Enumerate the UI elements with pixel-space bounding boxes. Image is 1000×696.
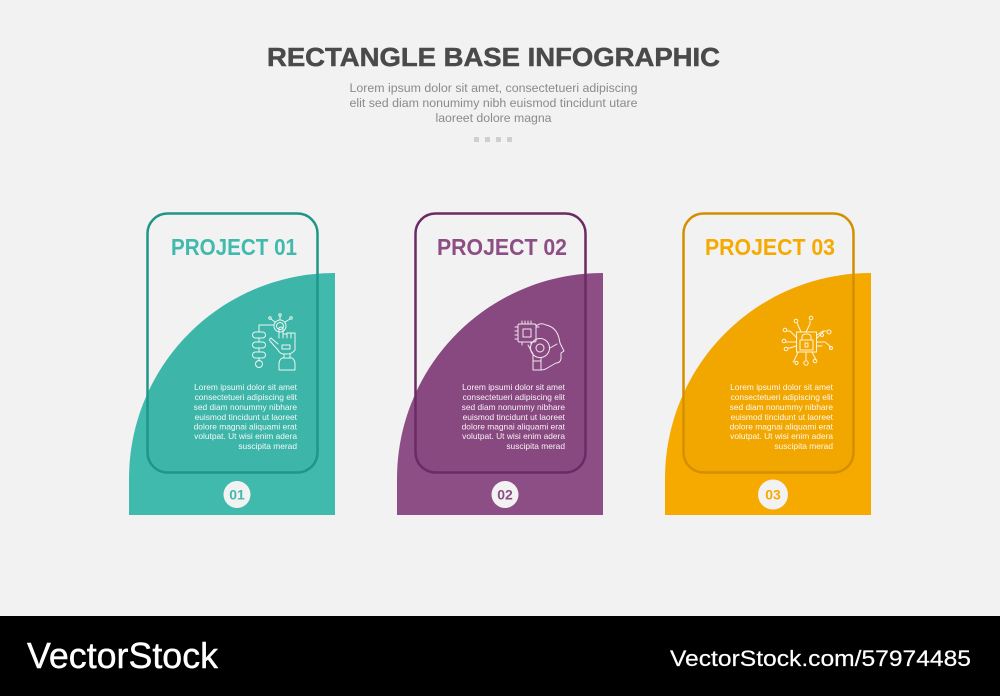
dots divider [474,137,512,142]
footer logo: VectorStock [27,635,219,676]
body text 01: dolore magnai aliquami erat [194,422,298,432]
body text 02: sed diam nonummy nibhare [462,402,565,412]
number badge 01: 01 [229,486,245,502]
number badge 03: 03 [765,486,781,502]
body text 02: Lorem ipsumi dolor sit amet [462,382,566,392]
body text 01 [194,382,298,451]
card overlap tint 02 [418,274,576,389]
body text 03: volutpat. Ut wisi enim adera [730,431,833,441]
footer url: VectorStock.com/57974485 [670,646,971,671]
body text 03: sed diam nonummy nibhare [730,402,833,412]
number badge 03 [758,480,788,510]
quarter-round base shape 01 [129,273,335,515]
quarter-round base shape 02 [397,273,603,515]
icon: AI chip head [515,321,564,370]
body text 03: Lorem ipsumi dolor sit amet [730,382,834,392]
body text 03 [730,382,834,451]
rounded outline card 02 [416,214,586,472]
subtitle text: Lorem ipsum dolor sit amet, consectetueri adipiscing [350,81,638,95]
subtitle text: laoreet dolore magna [436,111,552,125]
body text 01: euismod tincidunt ut laoreet [195,412,298,422]
body text 02: consectetueri adipiscing elit [463,392,566,402]
heading 03: PROJECT 03 [705,234,835,260]
card overlap tint 01 [190,278,291,333]
body text 02 [462,382,566,451]
body text 02: suscipita merad [506,441,565,451]
body text 01: suscipita merad [238,441,297,451]
quarter-round base shape 03 [665,273,871,515]
body text 02: dolore magnai aliquami erat [462,422,566,432]
body text 03: dolore magnai aliquami erat [730,422,834,432]
body text 03: suscipita merad [774,441,833,451]
panel: project 01 [129,214,335,515]
body text 02: euismod tincidunt ut laoreet [463,412,566,422]
subtitle text: elit sed diam nonumimy nibh euismod tincidunt utare [350,96,638,110]
number badge 02: 02 [497,486,513,502]
card overlap tint 03 [684,214,853,472]
number badge 02 [492,481,518,508]
body text 02: volutpat. Ut wisi enim adera [462,431,565,441]
heading 01: PROJECT 01 [171,234,297,260]
body text 01: consectetueri adipiscing elit [195,392,298,402]
title: RECTANGLE BASE INFOGRAPHIC [267,42,720,72]
subtitle text [350,81,638,125]
number badge 01 [224,481,250,508]
icon: robot hand pressing button [252,314,295,370]
icon: circuit padlock [782,316,832,365]
body text 01: Lorem ipsumi dolor sit amet [194,382,298,392]
rounded outline card 03 [684,214,854,472]
body text 01: volutpat. Ut wisi enim adera [194,431,297,441]
panel: project 03 [665,214,871,515]
body text 01: sed diam nonummy nibhare [194,402,297,412]
footer bar [0,616,1000,696]
panel: project 02 [397,214,603,515]
body text 03: consectetueri adipiscing elit [731,392,834,402]
rounded outline card 01 [148,214,318,472]
heading 02: PROJECT 02 [437,234,567,260]
body text 03: euismod tincidunt ut laoreet [731,412,834,422]
